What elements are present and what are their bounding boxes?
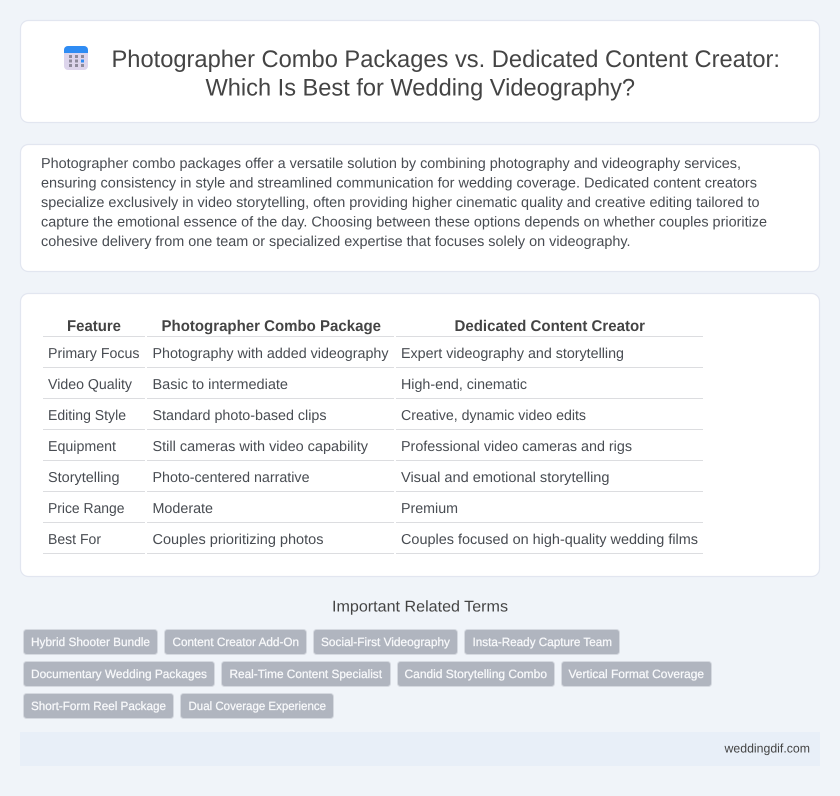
tag: Real-Time Content Specialist: [230, 667, 383, 681]
text block: introduction paragraph: [41, 156, 767, 250]
tag: [464, 630, 620, 654]
tag: Candid Storytelling Combo: [404, 667, 547, 681]
tag: Social-First Videography: [321, 635, 450, 649]
tag: Short-Form Reel Package: [31, 699, 166, 713]
row: primary focus: Photography with added videography: [152, 346, 389, 362]
row: video quality: Basic to intermediate: [152, 377, 288, 393]
title: [112, 46, 780, 102]
panel: comparison table: [20, 294, 820, 576]
text block: introduction paragraph: specialize exclusively in video storytelling, often providing higher cinematic quality and creative editing tailored to: [41, 195, 759, 211]
tag: [180, 694, 334, 718]
row: video quality: Video Quality: [48, 377, 133, 393]
tag: Documentary Wedding Packages: [31, 667, 207, 681]
row: storytelling: Visual and emotional storytelling: [401, 470, 610, 486]
table header: Photographer Combo Package: [162, 318, 381, 335]
tag: [222, 662, 390, 686]
row: price range: Moderate: [152, 501, 213, 517]
row: best for: Couples focused on high-quality wedding films: [401, 532, 698, 548]
row: video quality: [48, 377, 527, 393]
footer: [20, 732, 820, 766]
tags: related terms: [24, 630, 712, 718]
row: best for: Couples prioritizing photos: [152, 532, 324, 548]
tag: Content Creator Add-On: [172, 635, 299, 649]
row: editing style: Creative, dynamic video edits: [401, 408, 586, 424]
tag: [398, 662, 554, 686]
row: equipment: [48, 439, 632, 455]
row: video quality: High-end, cinematic: [401, 377, 527, 393]
row: equipment: Professional video cameras and rigs: [401, 439, 632, 455]
tag: [24, 694, 174, 718]
tag: Vertical Format Coverage: [568, 667, 704, 681]
title: Which Is Best for Wedding Videography?: [206, 74, 635, 102]
row: best for: [48, 532, 698, 548]
row: equipment: Still cameras with video capability: [152, 439, 369, 455]
row: price range: Premium: [401, 501, 458, 517]
title: Photographer Combo Packages vs. Dedicated Content Creator:: [112, 46, 780, 73]
text block: introduction paragraph: capture the emotional essence of the day. Choosing between these options depends on whether couples prioritize: [41, 214, 767, 230]
row: storytelling: [48, 470, 610, 486]
panel: introduction: [20, 144, 820, 272]
tag: [24, 630, 158, 654]
tag: [164, 630, 306, 654]
row: primary focus: Primary Focus: [48, 346, 140, 362]
heading: important related terms: Important Related Terms: [332, 598, 508, 616]
row: price range: [48, 501, 458, 517]
text block: introduction paragraph: Photographer combo packages offer a versatile solution by combining photography and videography services,: [41, 156, 741, 172]
footer: weddingdif.com: [724, 742, 810, 756]
row: best for: Best For: [48, 532, 101, 548]
row: editing style: [48, 408, 586, 424]
row: storytelling: Storytelling: [48, 470, 120, 486]
tag: Hybrid Shooter Bundle: [31, 635, 150, 649]
tag: Dual Coverage Experience: [188, 699, 326, 713]
panel: header: [20, 20, 820, 122]
row: editing style: Standard photo-based clips: [152, 408, 326, 424]
text block: introduction paragraph: cohesive delivery from one team or specialized expertise that focuses solely on videography.: [41, 234, 630, 250]
table header: [67, 318, 645, 335]
text block: introduction paragraph: ensuring consistency in style and streamlined communication for wedding coverage. Dedicated content creators: [41, 176, 757, 192]
tag: Insta-Ready Capture Team: [472, 635, 612, 649]
row: primary focus: Expert videography and storytelling: [401, 346, 624, 362]
tag: [24, 662, 214, 686]
row: primary focus: [48, 346, 624, 362]
icon: calendar: [64, 46, 88, 70]
row: price range: Price Range: [48, 501, 124, 517]
table header: Dedicated Content Creator: [454, 318, 645, 335]
row: storytelling: Photo-centered narrative: [152, 470, 310, 486]
table header: Feature: [67, 318, 121, 335]
row: editing style: Editing Style: [48, 408, 126, 424]
tag: [314, 630, 458, 654]
row: equipment: Equipment: [48, 439, 116, 455]
tag: [562, 662, 712, 686]
